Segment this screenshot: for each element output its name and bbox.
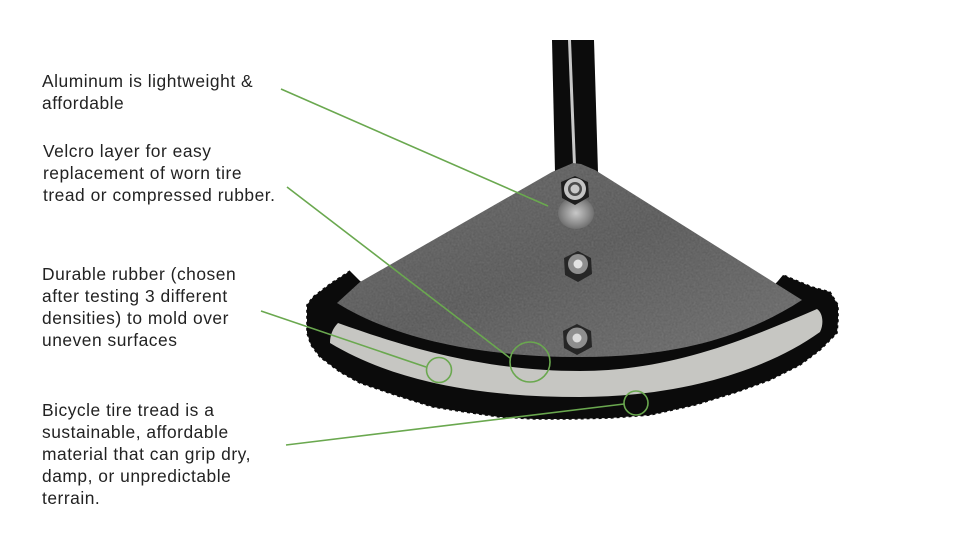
text: durable rubber: uneven surfaces [42, 330, 177, 350]
icon: middle bolt [564, 251, 592, 282]
icon: pole [552, 40, 598, 172]
icon: aluminum plate [337, 163, 802, 357]
text: bicycle tire tread: terrain. [42, 488, 100, 508]
text: aluminum: affordable [42, 93, 124, 113]
text: bicycle tire tread [42, 400, 251, 508]
callout line: aluminum [281, 89, 548, 206]
text: bicycle tire tread: damp, or unpredictable [42, 466, 231, 486]
text: velcro: replacement of worn tire [43, 163, 242, 183]
icon: bottom bolt [563, 324, 592, 355]
icon: top bolt [561, 176, 589, 205]
text: velcro [43, 141, 276, 205]
callout: velcro [287, 187, 550, 382]
text: aluminum: Aluminum is lightweight & [42, 71, 253, 91]
icon: rubber layer [330, 309, 822, 397]
text: bicycle tire tread: Bicycle tire tread is a [42, 400, 214, 420]
text: velcro: tread or compressed rubber. [43, 185, 276, 205]
text: durable rubber: densities) to mold over [42, 308, 229, 328]
text: durable rubber: Durable rubber (chosen [42, 264, 236, 284]
text: velcro: Velcro layer for easy [43, 141, 211, 161]
text: bicycle tire tread: material that can grip dry, [42, 444, 251, 464]
text: aluminum [42, 71, 253, 113]
callout: tread [286, 391, 648, 445]
callout: rubber [261, 311, 452, 382]
text: durable rubber [42, 264, 236, 350]
text: bicycle tire tread: sustainable, affordable [42, 422, 229, 442]
text: durable rubber: after testing 3 different [42, 286, 228, 306]
icon: tire tread [307, 271, 838, 419]
